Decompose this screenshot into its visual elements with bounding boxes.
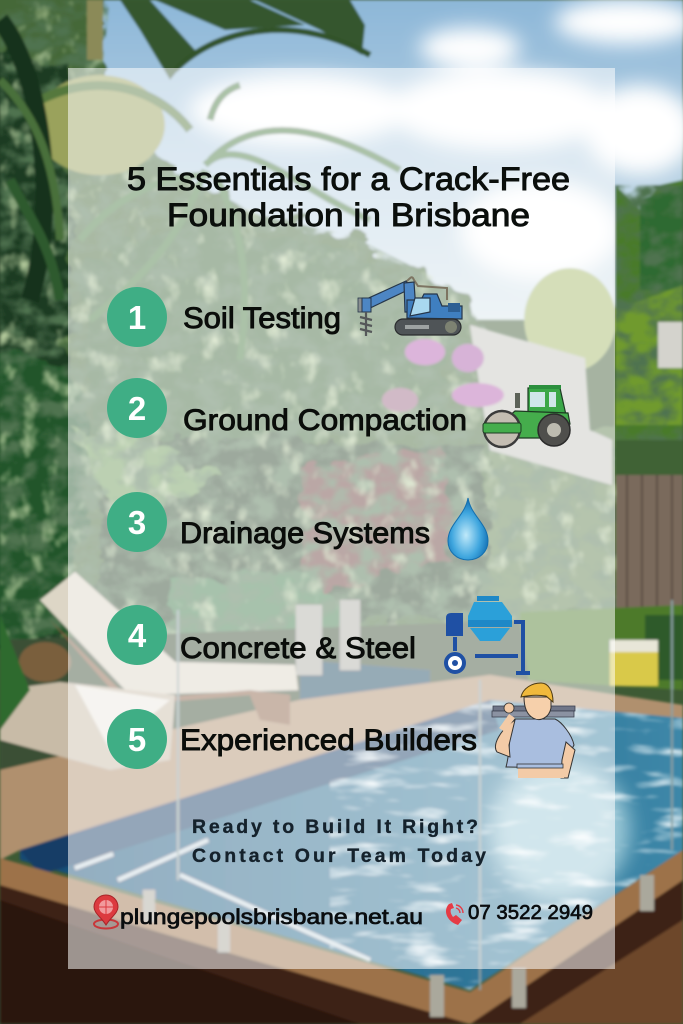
title (127, 161, 570, 233)
number badge 4: 4 (128, 617, 147, 654)
number badge 2: 2 (128, 390, 146, 427)
number badge 2 (107, 378, 167, 438)
phone contact (446, 902, 593, 925)
label: experienced builders: Experienced Builders (180, 724, 477, 757)
website contact (94, 895, 423, 929)
garden mass (0, 0, 640, 650)
title: Foundation in Brisbane (167, 197, 530, 233)
number badge 5 (107, 709, 167, 769)
label: soil testing: Soil Testing (183, 302, 341, 335)
label: ground compaction: Ground Compaction (183, 404, 467, 437)
call to action (192, 816, 486, 867)
number badge 1: 1 (128, 299, 146, 336)
phone number: 07 3522 2949 (468, 902, 593, 924)
number badge 1 (107, 287, 167, 347)
title: 5 Essentials for a Crack-Free (127, 161, 570, 197)
number badge 3 (107, 492, 167, 552)
icon: map pin (94, 895, 118, 928)
item 1: soil testing (107, 277, 462, 347)
number badge 3: 3 (128, 504, 146, 541)
icon: cement mixer (446, 596, 530, 675)
item 2: ground compaction (107, 378, 570, 447)
icon: construction worker (492, 683, 575, 778)
item 4: concrete and steel (107, 596, 530, 675)
number badge 5: 5 (128, 721, 146, 758)
timber frame (0, 850, 683, 1024)
translucent white panel (68, 68, 615, 969)
icon: water drop (448, 498, 488, 560)
call to action: Ready to Build It Right? (192, 816, 478, 838)
label: concrete and steel: Concrete & Steel (180, 632, 416, 665)
number badge 4 (107, 605, 167, 665)
icon: road roller (483, 385, 570, 447)
item 5: experienced builders (107, 683, 575, 778)
deck (0, 675, 683, 860)
call to action: Contact Our Team Today (192, 845, 486, 867)
icon: drilling excavator (358, 277, 462, 336)
icon: telephone (446, 903, 463, 925)
label: drainage systems: Drainage Systems (180, 517, 430, 550)
website address: plungepoolsbrisbane.net.au (120, 905, 423, 929)
item 3: drainage systems (107, 492, 488, 560)
water (20, 700, 683, 990)
